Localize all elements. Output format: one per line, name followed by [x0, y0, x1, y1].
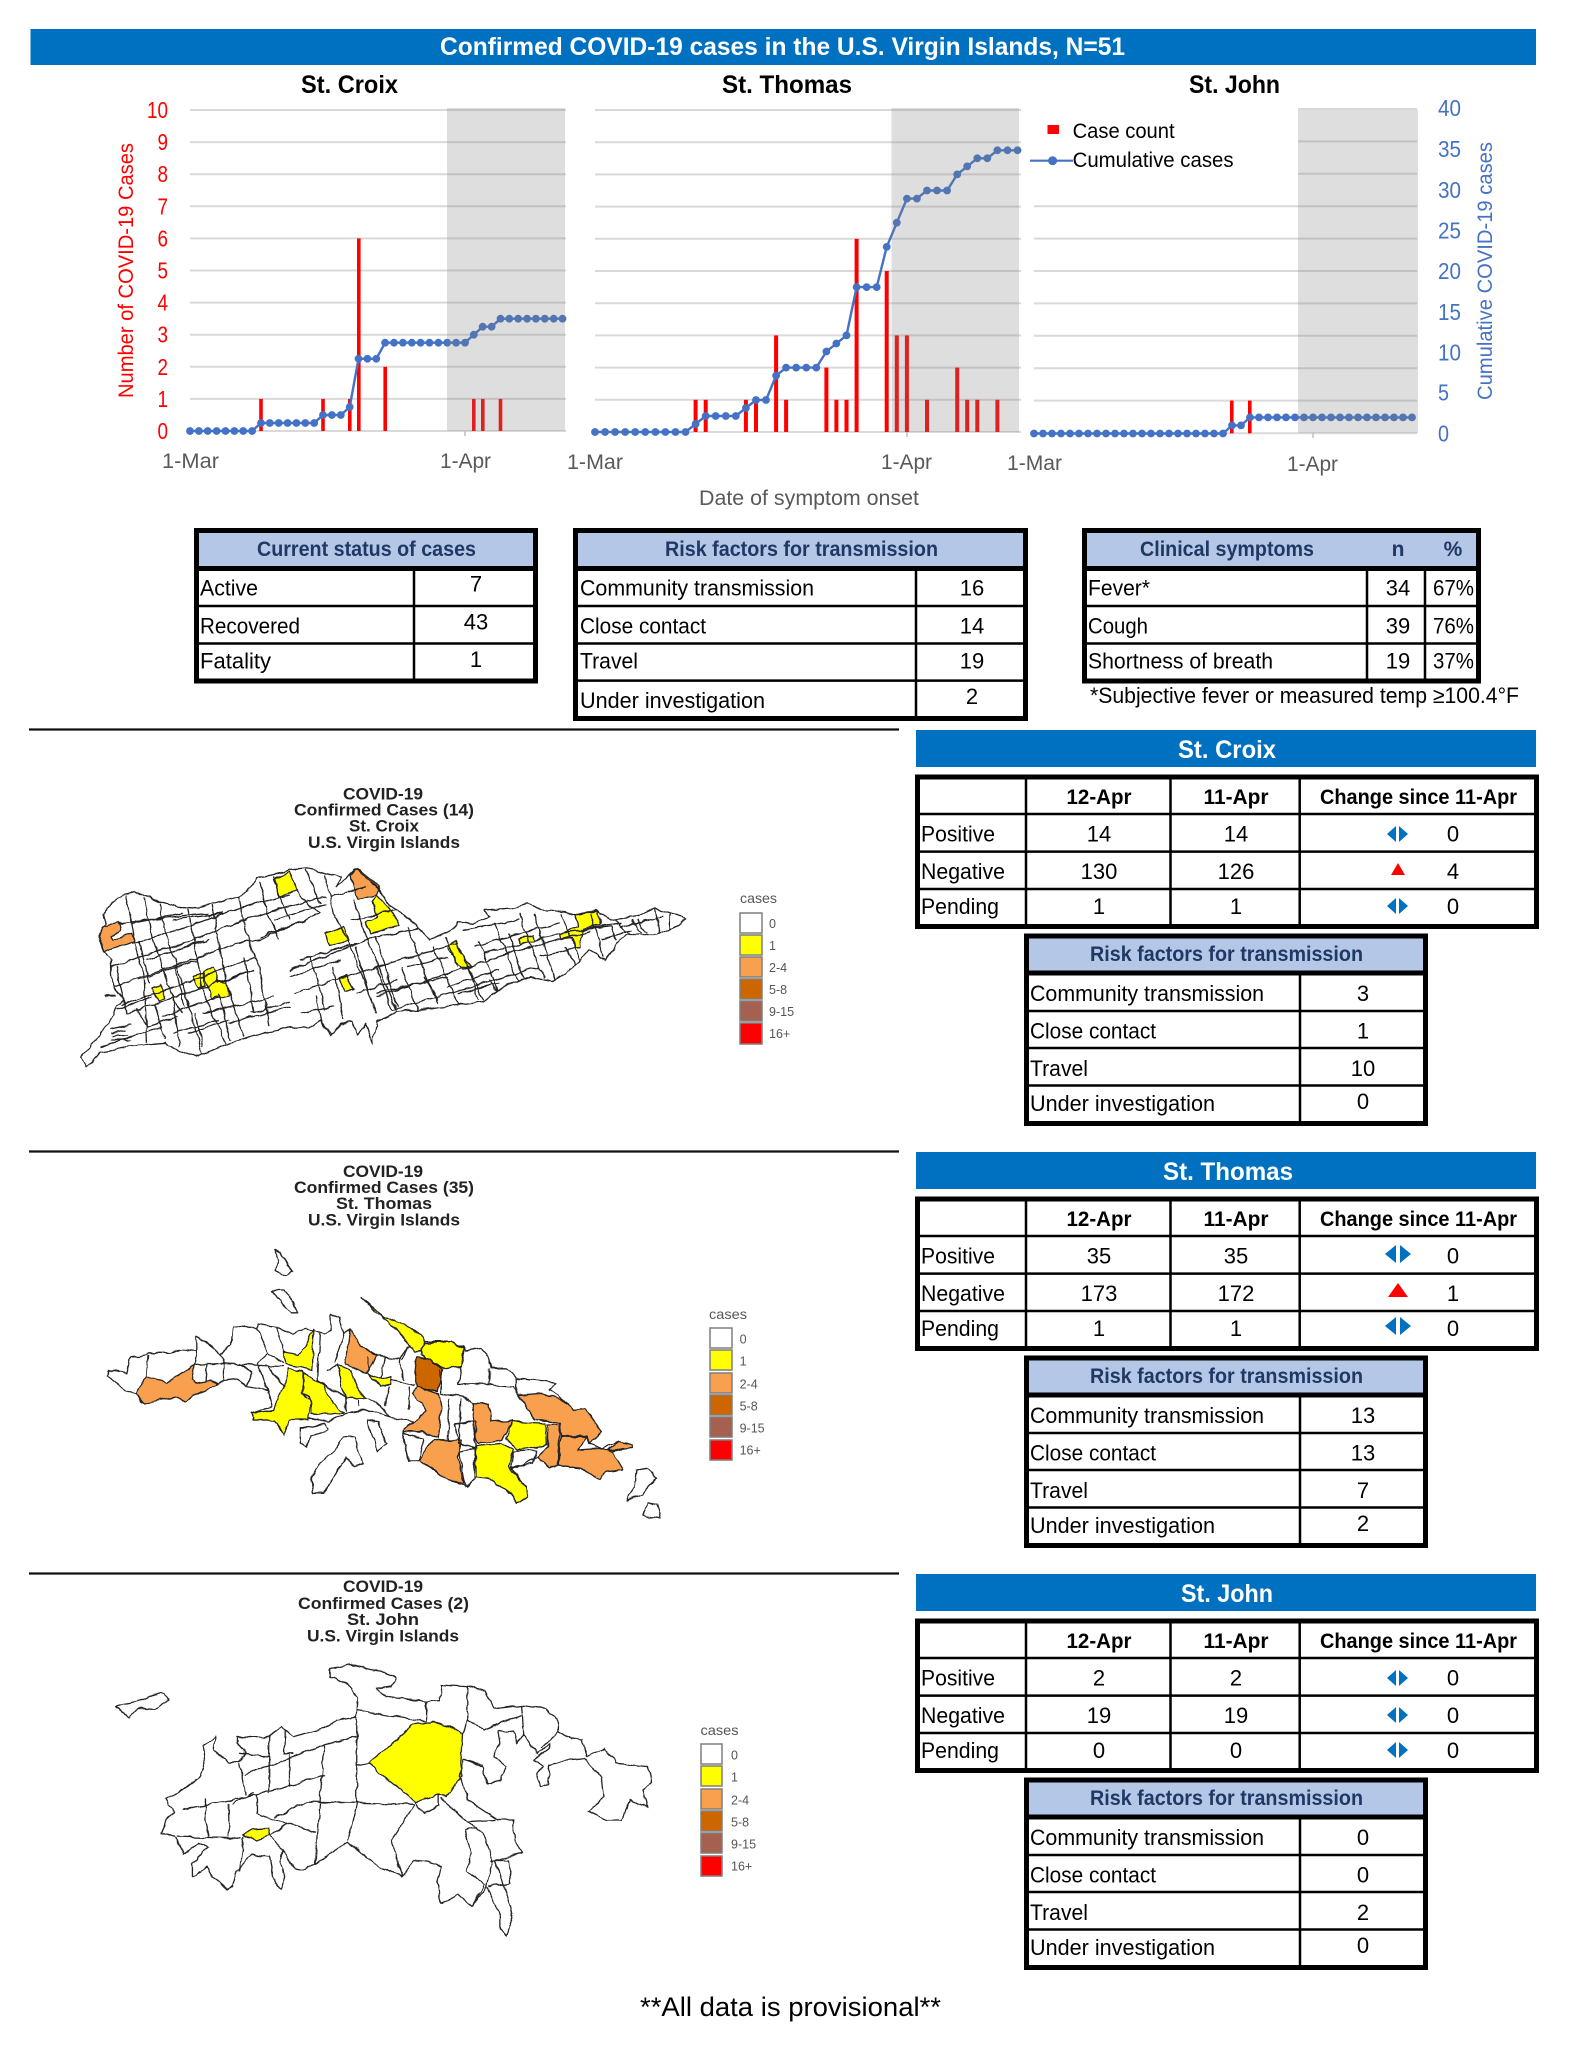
St. John risk factors table: Under investigation — [1030, 1935, 1215, 1960]
map legend: St. Thomas: 1 — [740, 1354, 747, 1368]
right axis: cumulative cases: 5 — [1438, 380, 1449, 406]
map legend: St. Thomas: 2-4 — [740, 1378, 758, 1392]
St. John testing table: Positive — [921, 1665, 995, 1690]
table: risk factors for transmission: Community transmission — [580, 576, 814, 601]
chart legend — [1030, 120, 1234, 172]
table: current status of cases: Current status of cases — [257, 538, 476, 561]
St. John testing table — [917, 1621, 1537, 1770]
map: St. John: Confirmed Cases (2) — [298, 1594, 469, 1613]
right axis: cumulative cases — [1438, 95, 1497, 446]
St. Thomas testing table: 35 — [1224, 1243, 1248, 1268]
chart: St. Thomas: St. Thomas — [722, 71, 852, 99]
right axis: cumulative cases: 40 — [1438, 95, 1461, 121]
St. Croix testing table: Negative — [921, 859, 1005, 884]
St. Croix testing table: 0 — [1447, 894, 1459, 919]
title banner: Confirmed COVID-19 cases in the U.S. Virgin Islands, N=51 — [440, 33, 1125, 61]
table: current status of cases: Active — [200, 576, 258, 601]
St. Thomas risk factors table: 7 — [1357, 1478, 1369, 1503]
map legend: St. Croix: cases — [740, 890, 777, 906]
St. Thomas risk factors table: 2 — [1357, 1511, 1369, 1536]
map legend: St. Croix: 2-4 — [769, 961, 787, 975]
table: clinical symptoms: % — [1444, 538, 1463, 561]
chart: St. Croix: 1-Apr — [440, 450, 491, 473]
right axis: cumulative cases: 30 — [1438, 177, 1461, 203]
St. John risk factors table: 2 — [1357, 1900, 1369, 1925]
St. Thomas testing table: 173 — [1081, 1281, 1117, 1306]
St. John testing table: 0 — [1447, 1665, 1459, 1690]
left axis: number of cases: Number of COVID-19 Cases — [115, 143, 138, 398]
map legend: St. Thomas: 0 — [740, 1332, 747, 1346]
table: clinical symptoms: 39 — [1386, 614, 1410, 639]
map legend: St. Croix: 5-8 — [769, 983, 787, 997]
map: St. Thomas: St. Thomas — [336, 1194, 432, 1213]
St. John risk factors table: Risk factors for transmission — [1090, 1787, 1363, 1810]
map: St. Thomas: Confirmed Cases (35) — [294, 1178, 474, 1197]
table: clinical symptoms: Clinical symptoms — [1140, 538, 1314, 561]
map legend: St. John — [700, 1722, 756, 1876]
map legend: St. John: 9-15 — [731, 1838, 756, 1852]
chart: St. Thomas: 1-Mar — [567, 451, 623, 474]
table: clinical symptoms: Fever* — [1088, 576, 1150, 601]
St. John testing table: 19 — [1224, 1703, 1248, 1728]
St. Croix testing table: 11-Apr — [1204, 786, 1268, 809]
map legend: St. John: 1 — [731, 1770, 738, 1784]
left axis: number of cases: 9 — [158, 129, 168, 155]
map legend: St. Croix: 16+ — [769, 1027, 790, 1041]
left axis: number of cases: 10 — [147, 97, 168, 123]
St. Thomas testing table: Pending — [921, 1316, 999, 1341]
St. Croix testing table — [917, 777, 1537, 926]
St. John testing table: 19 — [1087, 1703, 1111, 1728]
table: risk factors for transmission: 2 — [966, 684, 978, 709]
St. John testing table: Pending — [921, 1738, 999, 1763]
St. Thomas risk factors table: Risk factors for transmission — [1090, 1365, 1363, 1388]
left axis: number of cases: 2 — [158, 354, 168, 380]
St. Croix testing table: 14 — [1087, 821, 1111, 846]
St. John status banner: St. John — [1181, 1580, 1273, 1608]
St. Croix risk factors table: Under investigation — [1030, 1091, 1215, 1116]
map: St. John: St. John — [347, 1610, 419, 1629]
table: risk factors for transmission: Risk factors for transmission — [665, 538, 938, 561]
table: risk factors for transmission: Under investigation — [580, 688, 765, 713]
map legend: St. Thomas: cases — [709, 1306, 747, 1322]
St. John risk factors table: 0 — [1357, 1825, 1369, 1850]
table: risk factors for transmission: 16 — [960, 576, 984, 601]
table: clinical symptoms: 37% — [1433, 648, 1474, 673]
table: current status of cases — [196, 530, 536, 681]
left axis: number of cases: 5 — [158, 258, 168, 284]
footnote: *Subjective fever or measured temp ≥100.4°F — [1090, 683, 1519, 708]
map legend: St. John: 16+ — [731, 1860, 752, 1874]
St. John testing table: 0 — [1447, 1703, 1459, 1728]
chart legend: Case count — [1073, 120, 1175, 143]
table: current status of cases: 1 — [470, 647, 482, 672]
St. Croix risk factors table: Close contact — [1030, 1019, 1156, 1044]
St. Thomas risk factors table — [1026, 1358, 1426, 1546]
map legend: St. Thomas — [709, 1306, 765, 1460]
St. Thomas status banner — [916, 1152, 1536, 1189]
St. Croix risk factors table: 3 — [1357, 981, 1369, 1006]
St. Thomas testing table: 1 — [1447, 1281, 1459, 1306]
chart: St. Croix: 1-Mar — [162, 450, 219, 473]
chart: St. John: 1-Mar — [1007, 452, 1062, 475]
St. Thomas testing table: 1 — [1093, 1316, 1105, 1341]
St. Thomas testing table: 11-Apr — [1204, 1208, 1268, 1231]
map: St. Croix: Confirmed Cases (14) — [294, 801, 474, 820]
chart: St. John — [1007, 71, 1418, 476]
table: clinical symptoms: 76% — [1433, 614, 1474, 639]
provisional data note: **All data is provisional** — [640, 1992, 942, 2022]
St. Thomas risk factors table: 13 — [1351, 1441, 1375, 1466]
St. John risk factors table: 0 — [1357, 1863, 1369, 1888]
St. Thomas risk factors table: Community transmission — [1030, 1403, 1264, 1428]
map legend: St. Thomas: 9-15 — [740, 1422, 765, 1436]
map: St. Croix: U.S. Virgin Islands — [308, 833, 460, 852]
map legend: St. John: cases — [700, 1722, 738, 1738]
title banner — [30, 29, 1536, 65]
St. Croix testing table: 130 — [1081, 859, 1117, 884]
map legend: St. Croix — [740, 890, 794, 1044]
St. Croix testing table: 4 — [1447, 859, 1459, 884]
table: risk factors for transmission: 19 — [960, 648, 984, 673]
St. John testing table: 0 — [1093, 1738, 1105, 1763]
table: risk factors for transmission: Close contact — [580, 614, 706, 639]
St. John status banner — [916, 1574, 1536, 1611]
map legend: St. Thomas: 5-8 — [740, 1400, 758, 1414]
right axis: cumulative cases: 15 — [1438, 299, 1461, 325]
St. Thomas risk factors table: Under investigation — [1030, 1513, 1215, 1538]
left axis: number of cases: 0 — [158, 418, 168, 444]
left axis: number of cases: 8 — [158, 161, 168, 187]
chart: St. Croix — [162, 71, 566, 473]
map legend: St. Croix: 1 — [769, 939, 776, 953]
St. John testing table: 0 — [1447, 1738, 1459, 1763]
table: clinical symptoms — [1084, 530, 1479, 681]
table: clinical symptoms: Shortness of breath — [1088, 648, 1273, 673]
table: risk factors for transmission — [575, 530, 1026, 718]
map: St. John: COVID-19 — [343, 1577, 423, 1596]
chart: St. Thomas — [567, 71, 1021, 474]
map: St. Thomas — [107, 1162, 660, 1518]
map legend: St. John: 2-4 — [731, 1794, 749, 1808]
table: current status of cases: 43 — [464, 610, 488, 635]
St. John testing table: Negative — [921, 1703, 1005, 1728]
St. John testing table: 2 — [1093, 1665, 1105, 1690]
table: risk factors for transmission: 14 — [960, 614, 984, 639]
left axis: number of cases: 1 — [158, 386, 168, 412]
St. Croix status banner — [916, 730, 1536, 767]
right axis: cumulative cases: Cumulative COVID-19 cases — [1474, 142, 1497, 400]
x axis title: Date of symptom onset — [699, 487, 919, 510]
table: risk factors for transmission: Travel — [580, 648, 638, 673]
right axis: cumulative cases: 25 — [1438, 218, 1461, 244]
St. Thomas risk factors table: 13 — [1351, 1403, 1375, 1428]
left axis: number of cases: 6 — [158, 225, 168, 251]
St. Croix risk factors table: Risk factors for transmission — [1090, 943, 1363, 966]
St. Thomas testing table: 0 — [1447, 1316, 1459, 1341]
St. Thomas risk factors table: Close contact — [1030, 1441, 1156, 1466]
table: current status of cases: Recovered — [200, 614, 300, 639]
left axis: number of cases: 4 — [158, 290, 168, 316]
St. Thomas testing table: 172 — [1218, 1281, 1254, 1306]
table: current status of cases: Fatality — [200, 648, 271, 673]
left axis: number of cases: 3 — [158, 322, 168, 348]
chart: St. Thomas: 1-Apr — [881, 451, 932, 474]
map legend: St. John: 0 — [731, 1748, 738, 1762]
St. Thomas testing table: Change since 11-Apr — [1320, 1208, 1517, 1231]
chart legend: Cumulative cases — [1073, 149, 1234, 172]
St. John testing table: 0 — [1230, 1738, 1242, 1763]
St. Croix testing table: 14 — [1224, 821, 1248, 846]
St. Thomas testing table — [917, 1199, 1537, 1348]
St. Croix testing table: 126 — [1218, 859, 1254, 884]
St. Croix testing table: 1 — [1093, 894, 1105, 919]
table: clinical symptoms: Cough — [1088, 614, 1148, 639]
St. Croix risk factors table: 10 — [1351, 1056, 1375, 1081]
St. Croix testing table: 1 — [1230, 894, 1242, 919]
St. Croix risk factors table: 0 — [1357, 1089, 1369, 1114]
right axis: cumulative cases: 10 — [1438, 340, 1461, 366]
St. Thomas testing table: 1 — [1230, 1316, 1242, 1341]
table: current status of cases: 7 — [470, 572, 482, 597]
St. Croix testing table: 12-Apr — [1066, 786, 1132, 809]
map legend: St. Croix: 0 — [769, 917, 776, 931]
right axis: cumulative cases: 20 — [1438, 258, 1461, 284]
map legend: St. Thomas: 16+ — [740, 1444, 761, 1458]
St. Thomas risk factors table: Travel — [1030, 1478, 1088, 1503]
map: St. John: U.S. Virgin Islands — [307, 1626, 459, 1646]
map: St. Croix — [81, 784, 687, 1067]
St. Thomas testing table: Positive — [921, 1243, 995, 1268]
map: St. Thomas: U.S. Virgin Islands — [308, 1210, 460, 1230]
map: St. John — [115, 1577, 652, 1935]
map: St. Thomas: COVID-19 — [343, 1162, 423, 1181]
St. Thomas testing table: 0 — [1447, 1243, 1459, 1268]
St. John testing table: 11-Apr — [1204, 1630, 1268, 1653]
St. Croix status banner: St. Croix — [1178, 736, 1276, 764]
map: St. Croix: St. Croix — [349, 817, 420, 836]
St. Croix testing table: Change since 11-Apr — [1320, 786, 1517, 809]
chart: St. John: St. John — [1189, 71, 1280, 99]
St. Thomas status banner: St. Thomas — [1163, 1158, 1293, 1186]
St. Croix risk factors table: Travel — [1030, 1056, 1088, 1081]
St. John testing table: 2 — [1230, 1665, 1242, 1690]
table: clinical symptoms: 19 — [1386, 648, 1410, 673]
table: clinical symptoms: 67% — [1433, 576, 1474, 601]
map: St. Croix: COVID-19 — [343, 784, 423, 803]
table: clinical symptoms: 34 — [1386, 576, 1410, 601]
St. Croix testing table: Positive — [921, 821, 995, 846]
St. Croix testing table: 0 — [1447, 821, 1459, 846]
St. John risk factors table — [1026, 1780, 1426, 1968]
right axis: cumulative cases: 35 — [1438, 136, 1461, 162]
St. Croix risk factors table — [1026, 936, 1426, 1124]
St. John risk factors table: 0 — [1357, 1933, 1369, 1958]
chart: St. Croix: St. Croix — [301, 71, 398, 99]
St. John testing table: 12-Apr — [1066, 1630, 1132, 1653]
chart: St. John: 1-Apr — [1287, 453, 1338, 476]
table: clinical symptoms: n — [1392, 538, 1404, 561]
St. Croix risk factors table: Community transmission — [1030, 981, 1264, 1006]
map legend: St. John: 5-8 — [731, 1816, 749, 1830]
St. John risk factors table: Close contact — [1030, 1863, 1156, 1888]
St. Croix testing table: Pending — [921, 894, 999, 919]
St. Thomas testing table: 12-Apr — [1066, 1208, 1132, 1231]
St. John testing table: Change since 11-Apr — [1320, 1630, 1517, 1653]
left axis: number of cases — [115, 97, 168, 444]
St. John risk factors table: Travel — [1030, 1900, 1088, 1925]
St. Croix risk factors table: 1 — [1357, 1019, 1369, 1044]
St. Thomas testing table: 35 — [1087, 1243, 1111, 1268]
St. John risk factors table: Community transmission — [1030, 1825, 1264, 1850]
left axis: number of cases: 7 — [158, 193, 168, 219]
St. Thomas testing table: Negative — [921, 1281, 1005, 1306]
map legend: St. Croix: 9-15 — [769, 1005, 794, 1019]
right axis: cumulative cases: 0 — [1438, 420, 1449, 446]
